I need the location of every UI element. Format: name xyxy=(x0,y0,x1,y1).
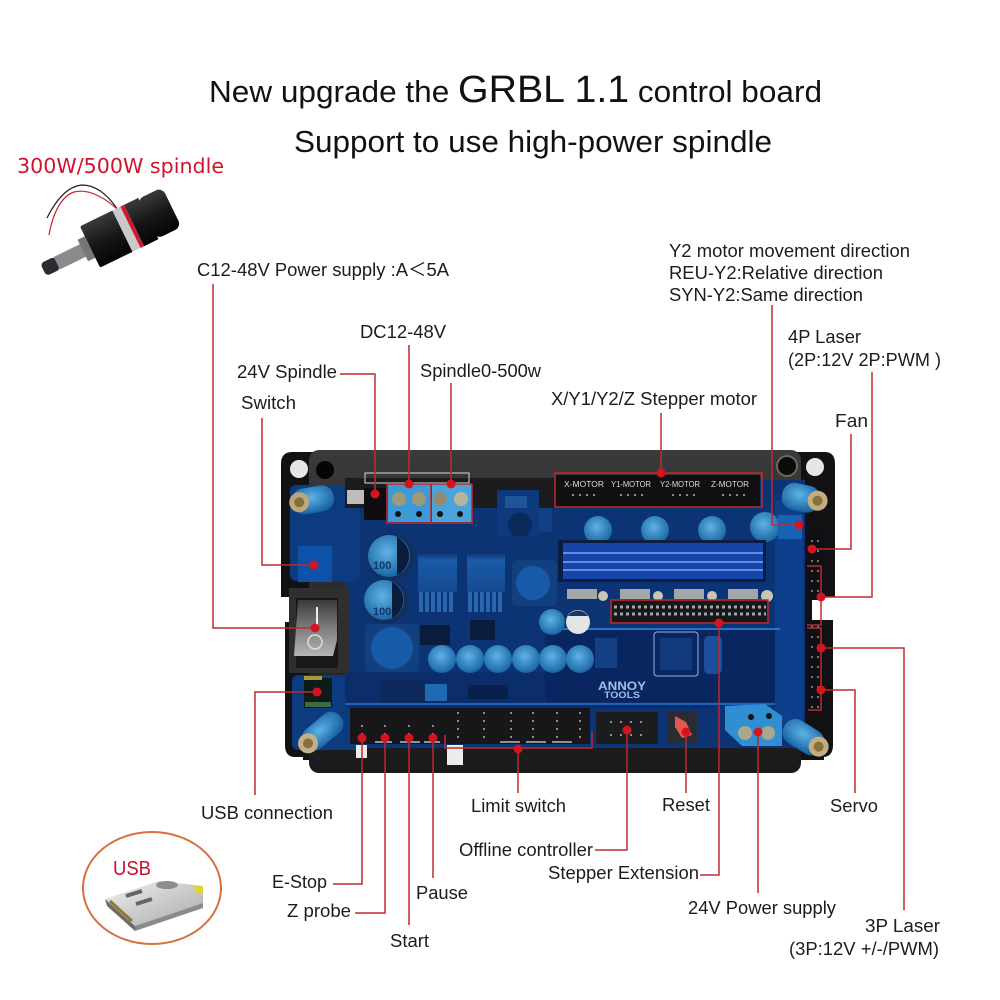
callout: Y2 direction xyxy=(772,305,804,530)
label: 3P laser xyxy=(789,916,940,959)
label: 24V spindle: 24V Spindle xyxy=(237,362,337,382)
motor connectors: Y2-MOTOR xyxy=(660,480,700,489)
callout lines and markers xyxy=(213,284,904,925)
label: reset: Reset xyxy=(662,795,710,815)
label: USB connection: USB connection xyxy=(201,803,333,823)
callout: 24V spindle xyxy=(340,374,380,498)
regulators xyxy=(380,552,508,702)
board xyxy=(281,450,835,773)
label: servo: Servo xyxy=(830,796,878,816)
heat sink xyxy=(558,540,766,582)
label: E-stop: E-Stop xyxy=(272,872,327,892)
brand logo: TOOLS xyxy=(604,690,640,700)
label: 24V power supply: 24V Power supply xyxy=(688,898,836,918)
label: start: Start xyxy=(390,931,429,951)
label: fan: Fan xyxy=(835,411,868,431)
brand logo: ANNOY xyxy=(598,679,646,693)
capacitors xyxy=(363,512,780,673)
blue switch button xyxy=(298,546,332,582)
label: Y2 direction xyxy=(669,241,910,305)
label: spindle 0-500w: Spindle0-500w xyxy=(420,361,542,381)
label: 4P laser: (2P:12V 2P:PWM ) xyxy=(788,350,941,370)
label: Y2 direction: Y2 motor movement direction xyxy=(669,241,910,261)
badge outline xyxy=(83,832,221,944)
labels xyxy=(197,241,941,959)
label: Y2 direction: SYN-Y2:Same direction xyxy=(669,285,863,305)
title: New upgrade the GRBL 1.1 control board xyxy=(209,69,822,111)
motor connectors xyxy=(555,475,760,507)
callout: spindle 0-500W xyxy=(446,383,456,488)
rocker switch xyxy=(289,588,349,673)
regulator block xyxy=(497,490,539,537)
label: stepper motor: X/Y1/Y2/Z Stepper motor xyxy=(551,389,757,409)
capacitors: 100 xyxy=(373,560,391,572)
callout: 24V power xyxy=(754,728,762,893)
badge text: USB xyxy=(113,858,151,880)
label: switch: Switch xyxy=(241,393,296,413)
power terminals xyxy=(347,473,472,522)
motor connectors: Z-MOTOR xyxy=(711,480,749,489)
label: Y2 direction: REU-Y2:Relative direction xyxy=(669,263,883,283)
callout: switch xyxy=(262,418,318,570)
callout: pause xyxy=(428,734,438,878)
label: 3P laser: (3P:12V +/-/PWM) xyxy=(789,939,939,959)
callout: Z probe xyxy=(355,734,390,913)
callout: E-stop xyxy=(333,734,366,884)
title xyxy=(209,69,822,159)
right headers xyxy=(778,515,824,712)
label: 3P laser: 3P Laser xyxy=(865,916,940,936)
standoffs xyxy=(287,481,834,763)
icon: spindle motor xyxy=(33,185,182,290)
callout: start xyxy=(404,734,414,925)
spindle label: 300W/500W spindle xyxy=(17,154,224,178)
mounting plate xyxy=(281,452,835,760)
callout: USB xyxy=(255,688,322,795)
mounting holes xyxy=(290,455,824,479)
24V terminal xyxy=(725,704,782,746)
label: offline controller: Offline controller xyxy=(459,840,593,860)
callout: stepper motor xyxy=(555,413,762,507)
label: DC12-48V: DC12-48V xyxy=(360,322,446,342)
callout: offline controller xyxy=(595,726,632,850)
label: limit switch: Limit switch xyxy=(471,796,566,816)
label: stepper extension: Stepper Extension xyxy=(548,863,699,883)
callout: 3P laser xyxy=(807,628,904,910)
callout: servo xyxy=(816,686,855,793)
bottom headers xyxy=(350,708,658,765)
callout: stepper extension xyxy=(611,600,768,875)
stepper extension pins xyxy=(611,600,768,623)
label: Z probe: Z probe xyxy=(287,901,351,921)
callout: power supply xyxy=(213,284,320,632)
power supply badge xyxy=(83,832,221,944)
microcontroller xyxy=(595,632,722,676)
capacitors: 100 xyxy=(373,606,391,618)
USB port xyxy=(304,676,332,708)
label: power supply: C12-48V Power supply :A＜5A xyxy=(197,260,449,280)
icon: power supply unit xyxy=(105,881,203,931)
callout: 4P laser xyxy=(807,372,872,625)
label: pause: Pause xyxy=(416,883,468,903)
label: 4P laser xyxy=(788,327,941,370)
callout: fan xyxy=(808,434,851,554)
callout: DC12-48V xyxy=(387,345,472,523)
brand logo xyxy=(598,679,646,700)
callout: reset xyxy=(682,728,690,793)
circuit board xyxy=(345,480,805,748)
title: Support to use high-power spindle xyxy=(294,125,772,159)
inductors xyxy=(365,560,557,672)
callout: limit switch xyxy=(445,732,592,793)
label: 4P laser: 4P Laser xyxy=(788,327,861,347)
motor connectors: X-MOTOR xyxy=(564,480,604,489)
reset button xyxy=(667,712,697,743)
driver resistors xyxy=(567,589,773,602)
motor connectors: Y1-MOTOR xyxy=(611,480,651,489)
